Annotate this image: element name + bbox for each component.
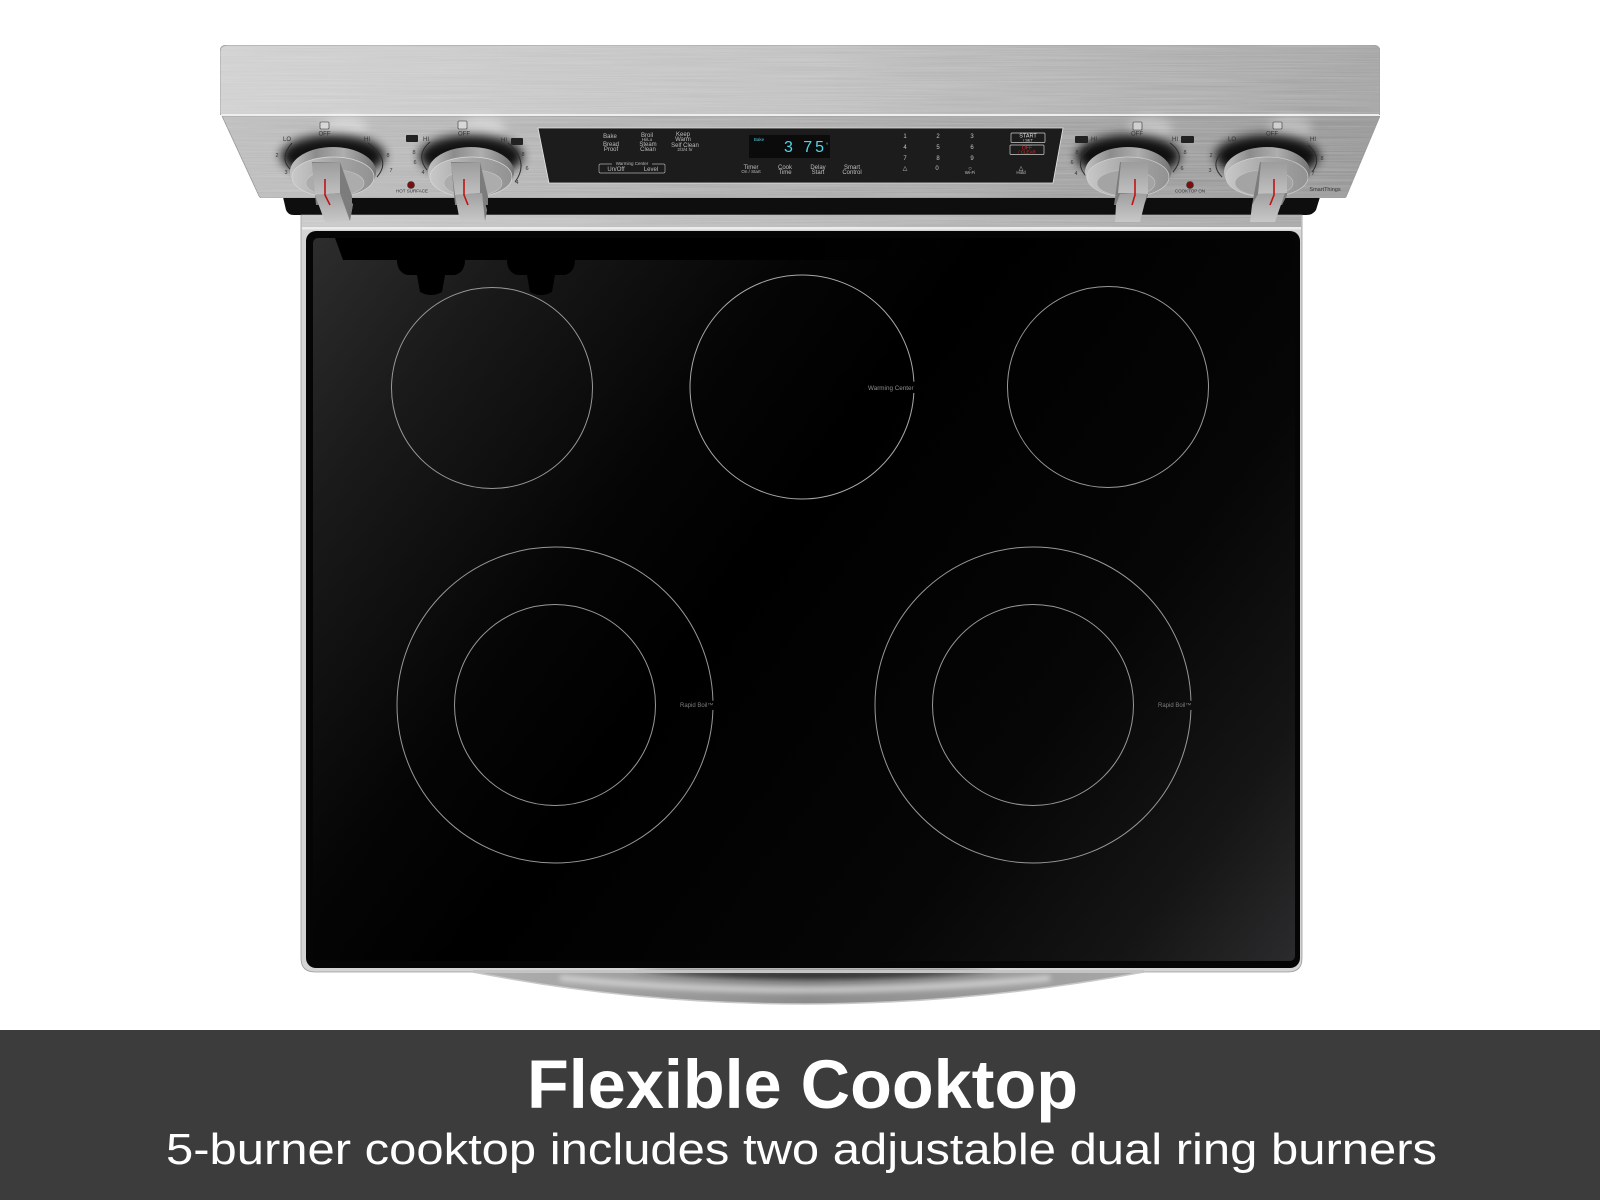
knob: left front	[406, 116, 529, 222]
oven mode labels: 2/3/4 hr	[677, 147, 693, 152]
door handle	[473, 970, 1144, 1004]
oven mode labels: Bread	[603, 142, 619, 148]
display: oven temperature: °	[826, 143, 829, 149]
number keypad: 5	[936, 145, 940, 151]
burner: warming center: Warming Center	[868, 385, 914, 392]
knob: right rear: HI	[1310, 137, 1316, 143]
knob: right front: 4	[1074, 171, 1078, 177]
warming center buttons	[599, 161, 665, 173]
oven mode labels: Proof	[604, 147, 619, 153]
knob: right front: 8	[1075, 150, 1079, 156]
panel: stainless top surface of backguard	[220, 45, 1380, 116]
knob: right front: HI	[1091, 137, 1097, 143]
timer and smart control labels: Delay	[810, 165, 826, 171]
number keypad: 7	[903, 156, 907, 162]
panel: black underside below control panel	[283, 197, 1320, 215]
oven mode labels: Warm	[675, 137, 691, 143]
number keypad: △	[903, 166, 908, 172]
burner: front right dual ring	[875, 547, 1191, 863]
banner: caption	[0, 1030, 1600, 1200]
reflection: control panel shadow on glass	[335, 238, 1000, 295]
burner: front left dual ring	[397, 547, 713, 863]
burner: front left dual ring: Rapid Boil™	[680, 702, 713, 709]
knob: right front: 6	[1070, 160, 1074, 166]
off clear button: OFF	[1022, 146, 1032, 152]
knob: left front: 6	[413, 160, 417, 166]
indicator: cooktop on	[1175, 182, 1205, 194]
warming center buttons: Warming Center	[616, 161, 649, 166]
knob: left front: HI	[501, 138, 507, 144]
timer and smart control labels: Timer	[743, 165, 759, 171]
panel: sloped control face	[222, 116, 1380, 198]
timer and smart control labels: Smart	[844, 165, 860, 171]
start button: / SET	[1023, 138, 1034, 142]
number keypad: 1	[903, 134, 907, 140]
knob: right front: 6	[1180, 166, 1184, 172]
number keypad: 4	[903, 145, 907, 151]
number keypad: ○	[968, 166, 972, 172]
knob: right rear: 7	[1311, 171, 1315, 177]
knob: right rear: 8	[1320, 156, 1324, 162]
timer and smart control labels: Cook	[778, 165, 793, 171]
warming center buttons: Level	[644, 167, 658, 173]
knob: left rear: 3	[284, 170, 288, 176]
burner: front right dual ring: Rapid Boil™	[1158, 702, 1191, 709]
title: Flexible Cooktop	[527, 1046, 1078, 1123]
number keypad: 8	[936, 156, 940, 162]
indicator: cooktop on: COOKTOP ON	[1175, 188, 1205, 194]
oven mode labels	[603, 132, 699, 153]
burner: warming center	[690, 275, 914, 499]
number keypad: △	[1019, 166, 1024, 172]
display: oven temperature: Bake	[754, 137, 765, 142]
number keypad: 9	[970, 156, 974, 162]
oven mode labels: Broil	[641, 133, 653, 139]
knob: right rear	[1208, 116, 1324, 222]
knob: right rear: OFF	[1266, 132, 1278, 138]
timer and smart control labels: Control	[842, 170, 862, 176]
number keypad: 3	[970, 134, 974, 140]
panel: black glass cooktop	[306, 231, 1300, 968]
oven mode labels: Steam	[639, 142, 657, 148]
indicator: hot surface: HOT SURFACE	[396, 188, 428, 194]
knob: right rear: 2	[1209, 153, 1213, 159]
knob: left front: 4	[421, 170, 425, 176]
knob: left rear: LO	[283, 137, 291, 143]
display: oven temperature: 3 75	[784, 139, 824, 156]
warming center buttons: Un/Off	[607, 167, 625, 173]
display: oven temperature	[749, 135, 830, 158]
oven mode labels: Self Clean	[671, 143, 699, 149]
number keypad: 6	[970, 145, 974, 151]
number keypad: 2	[936, 134, 940, 140]
start button: START	[1019, 134, 1037, 140]
off clear button: / CLEAR	[1018, 150, 1036, 154]
panel: cooktop outer frame	[301, 215, 1302, 972]
timer and smart control labels: Start	[812, 170, 825, 176]
knob: right rear: 3	[1208, 168, 1212, 174]
knob: left rear: 7	[389, 168, 393, 174]
burner: rear right	[1008, 286, 1208, 488]
timer and smart control labels	[741, 165, 862, 176]
number keypad: Wi-Fi	[965, 170, 975, 175]
burner: rear left	[392, 288, 592, 488]
logo: SmartThings label: SmartThings	[1309, 187, 1341, 193]
knob: left front: HI	[423, 137, 429, 143]
knob: right rear: LO	[1228, 137, 1236, 143]
indicator: hot surface	[396, 182, 428, 194]
knob: left front: 8	[412, 150, 416, 156]
knob: left rear: OFF	[318, 132, 331, 138]
knob: right front: HI	[1172, 137, 1178, 143]
knob: right front: 8	[1183, 150, 1187, 156]
oven mode labels: Hi/Lo	[642, 137, 653, 142]
number keypad	[903, 134, 1026, 175]
knob: right front: OFF	[1131, 132, 1143, 138]
off clear button	[1010, 145, 1044, 154]
knob: left front: 6	[525, 166, 529, 172]
subtitle: 5-burner cooktop includes two adjustable dual ring burners	[166, 1125, 1437, 1174]
knob: right front	[1070, 116, 1194, 222]
knob: left rear: HI	[364, 137, 370, 143]
number keypad: 0	[935, 166, 939, 172]
oven mode labels: Clean	[640, 147, 656, 153]
timer and smart control labels: On / Start	[741, 169, 761, 174]
knob: left rear: 2	[275, 153, 279, 159]
knob: left rear: 8	[386, 153, 390, 159]
panel: digital control panel	[538, 128, 1063, 183]
knob: left front: 4	[515, 180, 519, 186]
number keypad: Hold	[1016, 170, 1026, 175]
timer and smart control labels: Time	[778, 170, 792, 176]
knob: left front: 8	[521, 152, 525, 158]
knob: left rear	[275, 116, 393, 222]
knob: left front: OFF	[458, 132, 470, 138]
oven mode labels: Bake	[603, 134, 617, 140]
start button	[1011, 133, 1045, 142]
oven mode labels: Keep	[676, 132, 691, 138]
